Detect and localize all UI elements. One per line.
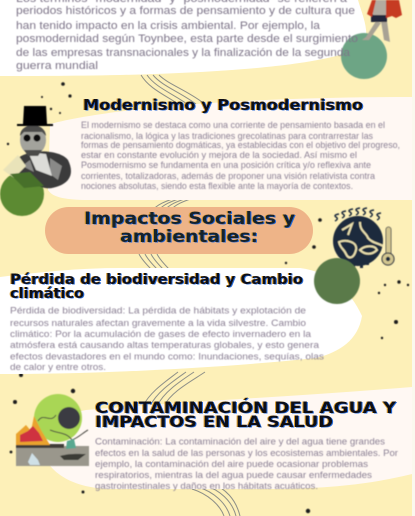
body text: nociones absolutas, siendo esta flexible ante la mayoría de contextos. (81, 181, 353, 191)
icon: green circle with standing figure (341, 0, 402, 79)
body text: Posmodernismo se fundamenta en una posición crítica y/o reflexiva ante (81, 160, 371, 170)
body text: respiratorios, mientras la del agua puede causar enfermedades (95, 470, 373, 480)
coat (18, 151, 71, 188)
icon: portrait with top hat (0, 106, 71, 216)
glasses (23, 134, 41, 142)
heading (95, 398, 396, 431)
icon: pollution scene (16, 394, 89, 466)
heading pill: Impactos Sociales y ambientales (45, 207, 313, 254)
continents (339, 222, 383, 257)
figure red cape (367, 0, 402, 18)
lime circle (34, 394, 82, 442)
body text: corrientes, totalizadoras, además de proponer una visión relativista contra (81, 171, 375, 181)
dark green circle (314, 258, 360, 304)
figure legs (362, 21, 390, 42)
left shoulder (3, 155, 26, 178)
heading: CONTAMINACIÓN DEL AGUA Y (95, 398, 396, 417)
globe (333, 216, 383, 266)
body text: formas de pensamiento dogmáticas, ya establecidas con el objetivo del progreso, (81, 140, 400, 150)
thermometer (382, 227, 394, 265)
pill (45, 207, 313, 254)
intro text: periodos históricos y a formas de pensamiento y de cultura que (16, 5, 355, 17)
fire core (20, 426, 43, 442)
shirt (28, 152, 52, 176)
pill text (84, 209, 295, 246)
hat (17, 106, 53, 126)
puddle (60, 454, 86, 460)
body text: ejemplo, la contaminación del aire puede ocasionar problemas (95, 459, 369, 469)
fire (16, 416, 50, 445)
hair and jaw shading (20, 125, 46, 156)
heading: Pérdida de biodiversidad y Cambio (10, 272, 303, 288)
panel: Pérdida de biodiversidad y Cambio climático (0, 268, 362, 374)
body text: Contaminación: La contaminación del aire y del agua tiene grandes (95, 436, 386, 446)
intro text: de las empresas transnacionales y la finalización de la segunda (16, 47, 350, 59)
body text: Pérdida de biodiversidad: La pérdida de hábitats y explotación de (10, 306, 306, 316)
soil strip (16, 444, 64, 448)
hand over circle (10, 172, 44, 188)
heat squiggles (335, 208, 381, 221)
figure shorts (371, 14, 387, 22)
face (20, 125, 46, 155)
panel background (48, 97, 412, 200)
body text: efectos en la salud de las personas y los ecosistemas ambientales. Por (95, 448, 398, 458)
bag (28, 453, 40, 465)
melting drips (352, 260, 369, 268)
ground (16, 446, 89, 466)
intro text (16, 0, 358, 72)
decorative arcs (139, 75, 240, 516)
body text (81, 120, 400, 191)
coat highlights (22, 158, 62, 180)
pill text: ambientales: (120, 227, 258, 246)
smoke ball (58, 407, 80, 429)
panel background (0, 268, 362, 374)
body text (10, 306, 325, 372)
intro text: posmodernidad según Toynbee, esta parte desde el surgimiento (16, 33, 358, 45)
body text: de calor y entre otros. (10, 362, 106, 372)
intro panel background (0, 0, 366, 76)
body text: recursos naturales afectan gravemente a la vida silvestre. Cambio (10, 318, 306, 328)
smoke trails (38, 415, 88, 440)
panel: Modernismo y Posmodernismo (48, 96, 412, 200)
heading: climático (10, 286, 84, 302)
body text: atmósfera está causando altas temperaturas globales, y esto genera (10, 340, 319, 350)
heading: Modernismo y Posmodernismo (83, 96, 363, 114)
intro text: han tenido impacto en la crisis ambiental. Por ejemplo, la (16, 20, 320, 32)
panel: Contaminación del agua e impactos en la salud (40, 387, 412, 491)
body text: gastrointestinales y daños en los hábitats acuáticos. (95, 481, 318, 491)
body text: climático: Por la acumulación de gases de efecto invernadero en la (10, 329, 311, 339)
body text: efectos devastadores en el mundo como: Inundaciones, sequías, olas (10, 352, 325, 362)
olive circle (0, 172, 44, 216)
body text: estar en constante evolución y mejora de la sociedad. Así mismo el (81, 150, 357, 160)
body text: racionalismo, la lógica y las tradiciones grecolatinas para contrarrestar las (81, 131, 373, 141)
bottle (66, 439, 76, 449)
pill text: Impactos Sociales y (84, 209, 295, 228)
figure torso (373, 0, 388, 15)
heading (10, 272, 303, 302)
heading: IMPACTOS EN LA SALUD (95, 412, 333, 431)
panel background (40, 387, 412, 489)
body text (95, 436, 398, 491)
green circle (341, 33, 387, 79)
intro text: guerra mundial (16, 60, 98, 72)
right edge strip (412, 0, 415, 516)
body text: El modernismo se destaca como una corriente de pensamiento basada en el (81, 120, 385, 130)
icon: melting globe with thermometer (333, 208, 394, 268)
